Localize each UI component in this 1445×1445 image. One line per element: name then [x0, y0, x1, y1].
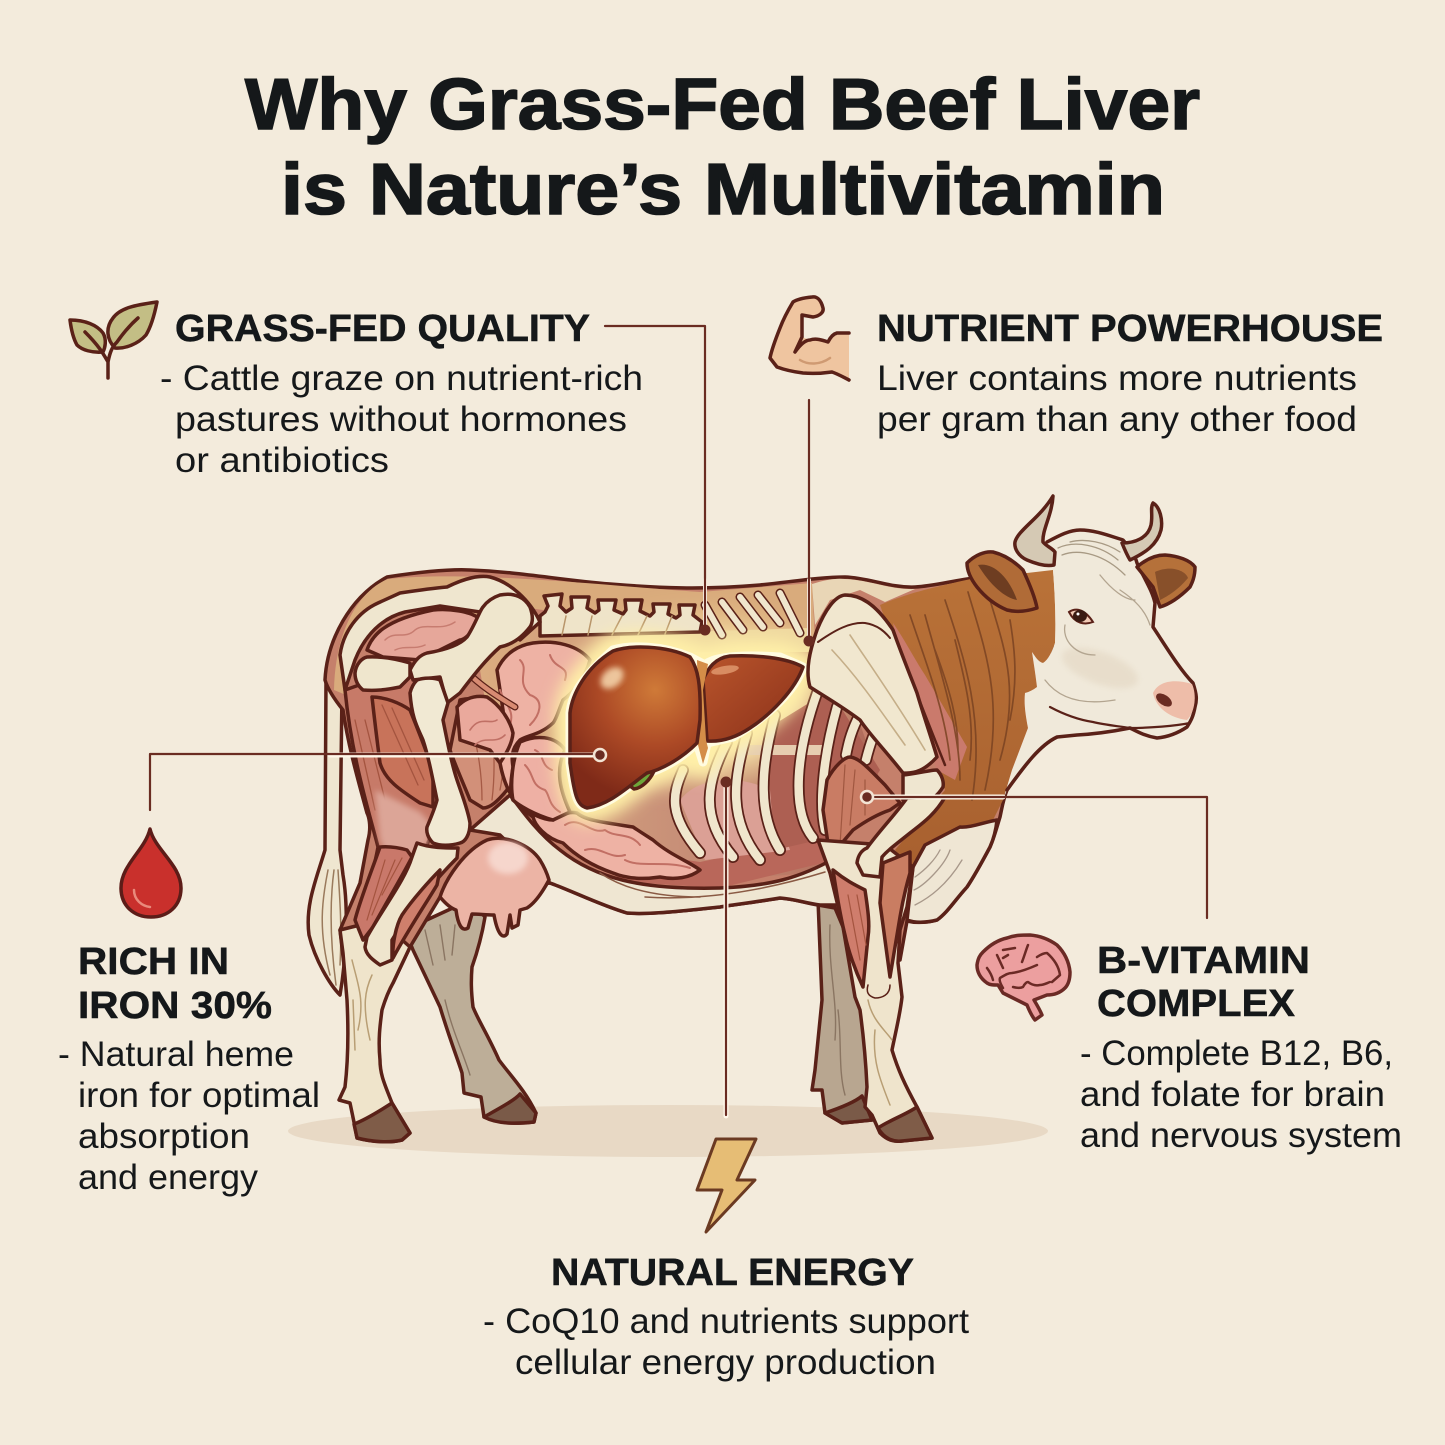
near foreleg hoof — [878, 1107, 932, 1141]
chest lung pink — [680, 780, 790, 860]
panel: rich in iron — [58, 941, 320, 1197]
panel: grass-fed quality: pastures without hormones — [175, 400, 627, 439]
hind lower muscle strip — [393, 870, 440, 958]
liver ligament — [697, 660, 708, 764]
far front hoof — [825, 1096, 872, 1123]
soft glow — [535, 600, 865, 800]
panel: natural energy: - CoQ10 and nutrients support — [483, 1302, 969, 1341]
back hide band — [334, 576, 815, 695]
muscle ribbon — [467, 672, 515, 707]
shoulder blade shading — [832, 635, 925, 750]
liver halo — [570, 647, 803, 808]
shoulder blade inner ridge — [818, 623, 890, 642]
right ear inner — [1155, 569, 1188, 600]
panel: nutrient powerhouse: Liver contains more nutrients — [877, 359, 1357, 398]
panel: natural energy: cellular energy production — [515, 1343, 936, 1382]
left ear — [967, 552, 1037, 611]
panel: rich in iron: and energy — [78, 1158, 259, 1197]
forearm bone — [857, 797, 945, 877]
panel: b-vitamin complex: COMPLEX — [1097, 983, 1296, 1025]
foreleg tendon shading — [868, 1000, 892, 1105]
callout: energy line — [720, 776, 732, 1116]
panel: nutrient powerhouse — [877, 308, 1383, 439]
right ear — [1137, 555, 1195, 607]
lower thigh fibres — [367, 858, 402, 920]
eye — [1069, 610, 1093, 623]
panel: nutrient powerhouse: per gram than any other food — [877, 400, 1357, 439]
shoulder muscle — [823, 757, 900, 857]
far hind hoof — [484, 1094, 536, 1123]
chest white — [907, 820, 997, 922]
left horn — [1015, 496, 1055, 566]
icon: brain — [977, 935, 1070, 1020]
shoulder fibres — [840, 765, 865, 845]
far hind leg — [405, 900, 536, 1123]
callout: nutrient line — [804, 400, 814, 646]
spine — [540, 594, 702, 636]
shoulder blade — [808, 595, 937, 773]
panel: b-vitamin complex: - Complete B12, B6, — [1080, 1034, 1393, 1073]
mouth line — [1050, 707, 1190, 728]
lower thigh muscle — [355, 847, 412, 940]
muzzle — [1153, 681, 1195, 720]
belly dark muscle band — [555, 835, 835, 888]
left ear inner — [978, 565, 1017, 600]
title: is Nature’s Multivitamin — [281, 150, 1165, 230]
abdominal cavity — [470, 610, 880, 885]
title — [245, 65, 1200, 230]
udder highlight — [488, 842, 528, 874]
callout: grass-fed line — [605, 326, 710, 636]
rump tissue squiggles — [385, 622, 455, 650]
liver right lobe — [703, 656, 803, 741]
near hind leg shading — [352, 960, 372, 1050]
muscle fibres — [355, 705, 424, 810]
ground shadow — [288, 1105, 1048, 1157]
belly tissue — [470, 795, 840, 913]
panel: rich in iron: absorption — [78, 1117, 250, 1156]
nostril — [1154, 691, 1174, 709]
foreleg central bone — [867, 985, 890, 998]
panel: rich in iron: iron for optimal — [78, 1076, 320, 1115]
sternum band — [745, 745, 825, 755]
panel: rich in iron: - Natural heme — [58, 1035, 294, 1074]
panel: grass-fed quality: GRASS-FED QUALITY — [175, 308, 590, 350]
panel: b-vitamin complex — [1080, 940, 1402, 1155]
far front leg hair — [830, 925, 845, 1095]
hamstring muscle — [372, 697, 433, 807]
icon: blood drop — [121, 829, 181, 917]
body silhouette — [325, 570, 1057, 1000]
udder — [440, 838, 549, 936]
near hind leg — [339, 920, 410, 1142]
tail hair lines — [322, 870, 341, 985]
liver left lobe — [570, 647, 700, 808]
neck brown coat — [880, 570, 1055, 870]
callout: b-vitamin line — [861, 791, 1207, 918]
sacrum and tail spine — [340, 576, 540, 690]
right horn — [1122, 503, 1162, 560]
pale hip tissue — [375, 790, 432, 870]
panel: grass-fed quality: - Cattle graze on nutrient-rich — [160, 359, 643, 398]
neck outline to shoulder — [893, 630, 945, 765]
liver glow — [570, 647, 803, 808]
far front leg — [812, 900, 872, 1123]
tail — [308, 680, 346, 995]
foreleg muscle left — [833, 870, 869, 987]
callout: iron line — [150, 749, 606, 810]
panel: b-vitamin complex: and nervous system — [1080, 1116, 1402, 1155]
chest dark muscle — [765, 690, 880, 850]
lower intestine lobe — [512, 737, 570, 820]
foreleg muscle fibres — [848, 895, 866, 960]
near hind hoof — [354, 1103, 410, 1142]
belly fold lines — [600, 872, 825, 898]
humerus joint — [903, 770, 943, 800]
panel: rich in iron: RICH IN — [78, 941, 229, 983]
panel: natural energy: NATURAL ENERGY — [551, 1252, 914, 1294]
forelock — [1058, 540, 1125, 575]
withers hide — [812, 579, 915, 625]
foreleg muscle right — [880, 852, 910, 977]
icon: flexed arm — [770, 297, 849, 380]
thoracic spines — [705, 593, 800, 635]
vertebra divisions — [562, 616, 672, 635]
panel: natural energy — [483, 1252, 969, 1382]
far hind hair — [425, 925, 470, 1075]
icon: leaf — [70, 302, 157, 378]
ilium bone — [410, 594, 532, 703]
liver highlights — [596, 663, 739, 693]
quad fibres — [470, 720, 504, 800]
panel: rich in iron: IRON 30% — [78, 985, 272, 1027]
head shading — [1057, 639, 1143, 697]
intestine folds — [500, 655, 690, 868]
femur bone — [410, 678, 470, 845]
head fill — [1003, 530, 1196, 800]
quad muscle — [450, 699, 515, 808]
panel: nutrient powerhouse: NUTRIENT POWERHOUSE — [877, 308, 1383, 350]
fat under spine — [620, 628, 810, 652]
ischium bone — [355, 657, 410, 690]
ribs — [675, 693, 873, 860]
tibia bone — [365, 843, 458, 965]
near foreleg — [818, 840, 932, 1141]
mid hind intestine — [457, 696, 513, 763]
gallbladder — [626, 771, 654, 789]
face lines — [1045, 575, 1150, 702]
chest shading lines — [914, 850, 962, 905]
mid intestine folds — [470, 720, 505, 745]
cow illustration — [308, 496, 1196, 1142]
head outline — [1007, 530, 1196, 790]
rump tissue — [367, 609, 477, 660]
panel: b-vitamin complex: and folate for brain — [1080, 1075, 1385, 1114]
panel: grass-fed quality: or antibiotics — [175, 441, 389, 480]
title: Why Grass-Fed Beef Liver — [245, 65, 1200, 145]
panel: b-vitamin complex: B-VITAMIN — [1097, 940, 1310, 982]
neck fur lines — [910, 592, 1015, 800]
icon: lightning bolt — [697, 1139, 756, 1232]
neck muscle strip — [893, 623, 967, 780]
panel: grass-fed quality — [160, 308, 643, 480]
intestines — [497, 642, 700, 878]
rear muscle mass — [345, 660, 445, 925]
